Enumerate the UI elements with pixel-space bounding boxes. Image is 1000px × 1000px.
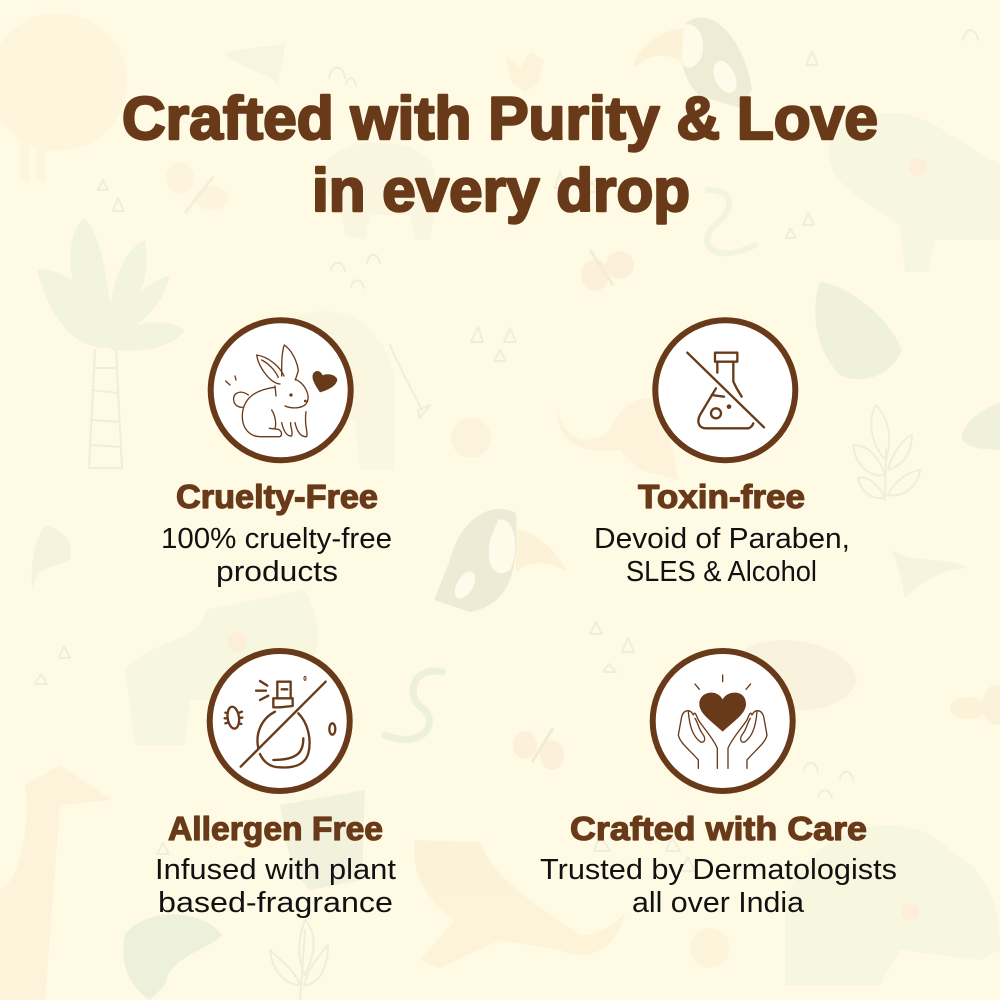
flower left (32, 525, 71, 590)
panel: toxin-free (594, 320, 850, 588)
giraffe (0, 765, 112, 1000)
butterfly top (166, 162, 229, 213)
description: 100% cruelty-free (161, 523, 392, 555)
monstera leaf (815, 282, 902, 379)
small bird (225, 42, 285, 88)
heading: Toxin-free (638, 478, 805, 515)
panel: cruelty-free (161, 320, 392, 588)
icon: crossed-out spray bottle and germs (210, 651, 350, 791)
description (540, 854, 897, 919)
title: Crafted with Purity & Love (122, 85, 878, 152)
title: in every drop (312, 157, 690, 224)
lizard right edge (962, 402, 1000, 450)
description: Trusted by Dermatologists (540, 854, 897, 886)
description: SLES & Alcohol (626, 556, 817, 588)
lion top left (0, 13, 127, 182)
heading: Allergen Free (168, 810, 383, 847)
toucan top (634, 17, 752, 108)
title (122, 85, 878, 224)
description: Devoid of Paraben, (594, 523, 850, 555)
icon: hands holding heart (653, 651, 793, 791)
cat left middle (125, 590, 318, 745)
description (161, 523, 392, 588)
butterfly lower (513, 728, 564, 770)
description: products (216, 556, 338, 588)
flower top (505, 52, 544, 92)
snake middle (385, 671, 442, 739)
line plant bottom (270, 920, 328, 1000)
icon: rabbit with heart (211, 320, 351, 460)
chameleon (123, 914, 222, 1000)
panel: crafted with care (540, 651, 897, 919)
hippo lower (745, 640, 857, 710)
hippo centre top (322, 142, 436, 240)
description: Infused with plant (155, 854, 396, 886)
description: based-fragrance (158, 887, 393, 919)
small triangles and arches (35, 52, 818, 871)
heading: Crafted with Care (570, 810, 867, 847)
flower centre (451, 418, 491, 458)
panel: allergen free (155, 651, 396, 919)
description (594, 523, 850, 588)
hummingbird right (892, 550, 968, 598)
butterfly right (950, 685, 1000, 725)
line plant right (853, 405, 920, 500)
leopard bottom (414, 840, 625, 968)
flower bottom (690, 928, 730, 968)
heading: Cruelty-Free (176, 478, 378, 515)
toucan middle (434, 509, 568, 612)
bear green (280, 790, 365, 890)
palm tree (37, 218, 185, 468)
elephant centre (240, 311, 395, 470)
icon: crossed-out flask (655, 320, 795, 460)
snake top (707, 190, 755, 253)
butterfly pink (581, 250, 634, 291)
hippo top right (828, 113, 1000, 272)
description (155, 854, 396, 919)
hippo bottom right (785, 825, 1000, 985)
leopard centre (558, 398, 678, 480)
description: all over India (632, 887, 804, 919)
